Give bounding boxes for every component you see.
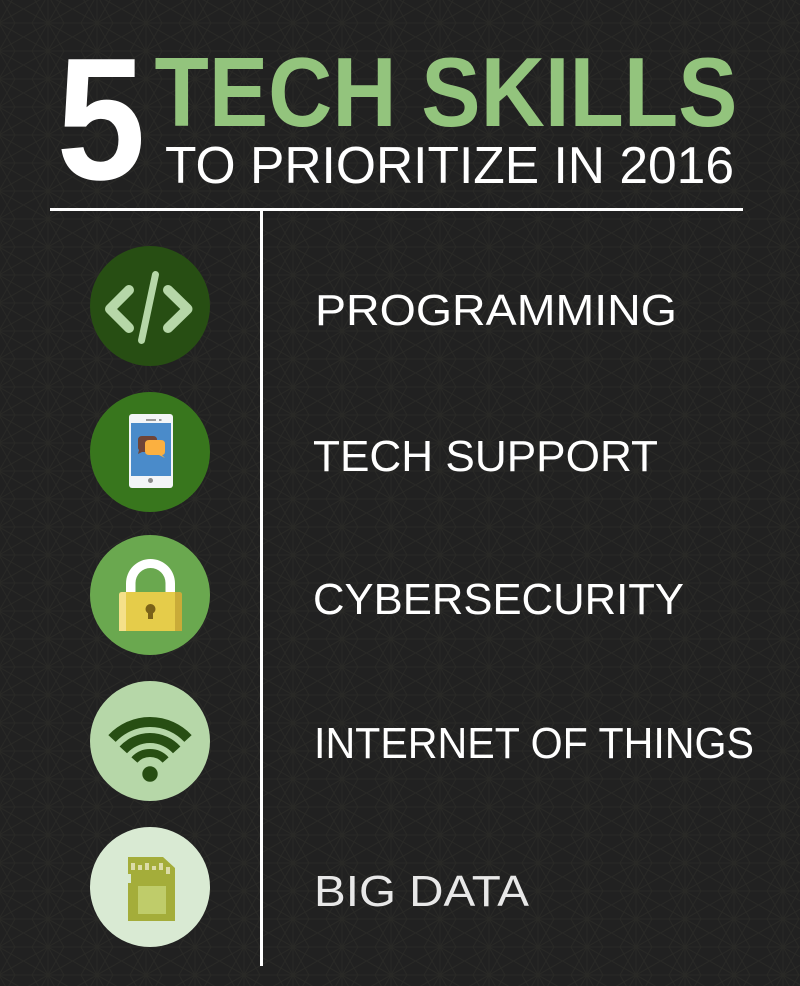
icon: smartphone with chat bubbles [90,392,210,512]
icon: code brackets [90,246,210,366]
title heading: tech skills: TECH SKILLS [154,37,738,147]
vertical rule [260,210,263,966]
row: big data [90,827,530,947]
label: internet of things: INTERNET OF THINGS [314,719,754,768]
row: cybersecurity [90,535,684,655]
icon: padlock [90,535,210,655]
icon: wifi signal [90,681,210,801]
subtitle: TO PRIORITIZE IN 2016 [165,137,734,195]
label: cybersecurity: CYBERSECURITY [313,575,684,624]
title number 5: 5 [56,21,146,216]
label: programming: PROGRAMMING [315,286,677,335]
row: tech support [90,392,658,512]
label: big data: BIG DATA [314,867,530,916]
label: tech support: TECH SUPPORT [313,432,658,481]
row: programming [90,246,677,366]
row: internet of things [90,681,754,801]
title [56,21,738,216]
icon: memory card [90,827,210,947]
horizontal rule [50,208,743,211]
